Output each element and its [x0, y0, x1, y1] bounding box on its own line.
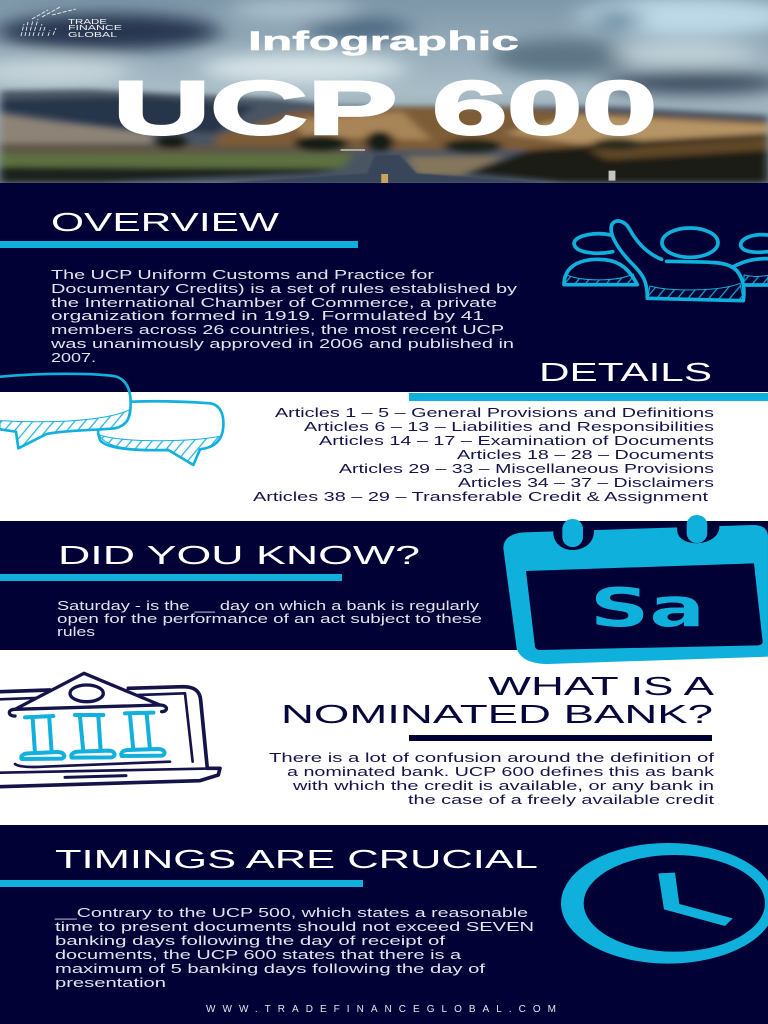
did you know text block: open for the performance of an act subject to these — [57, 612, 482, 626]
details list: Articles 38 – 29 – Transferable Credit & Assignment — [253, 490, 709, 504]
nominated bank text block: a nominated bank. UCP 600 defines this as bank — [287, 765, 715, 779]
icon: bank on a laptop — [0, 673, 220, 787]
logo: Trade Finance Global: GLOBAL — [68, 32, 117, 39]
timings text block: banking days following the day of receipt of — [55, 934, 446, 948]
did you know text block: rules — [57, 625, 95, 639]
header photo: road and clouds — [0, 0, 768, 183]
nominated bank text block: There is a lot of confusion around the definition of — [269, 751, 715, 765]
panel: timings background — [0, 825, 768, 1024]
icon: clock — [561, 843, 768, 964]
panel: did you know background — [0, 521, 768, 650]
title: UCP 600: UCP 600 — [113, 66, 657, 151]
details list: Articles 14 – 17 – Examination of Documents — [319, 434, 714, 448]
details list: Articles 18 – 28 – Documents — [457, 448, 714, 462]
details list: Articles 1 – 5 – General Provisions and Definitions — [275, 406, 714, 420]
details list — [253, 406, 714, 504]
timings text block: documents, the UCP 600 states that there is a — [55, 948, 461, 962]
details list: Articles 34 – 37 – Disclaimers — [458, 476, 714, 490]
overview text block: Documentary Credits) is a set of rules established by — [51, 282, 518, 296]
panel: details background — [0, 392, 768, 521]
details list: Articles 29 – 33 – Miscellaneous Provisions — [339, 462, 714, 476]
panel: nominated bank background — [0, 650, 768, 825]
timings text block: presentation — [55, 976, 166, 990]
icon: calendar — [503, 515, 768, 664]
overview text block: members across 26 countries, the most recent UCP — [51, 323, 504, 337]
timings accent bar — [0, 880, 363, 887]
logo: Trade Finance Global — [21, 7, 123, 39]
subtitle: Infographic: Infographic — [248, 26, 519, 56]
icon: speech bubbles — [0, 374, 223, 465]
overview accent bar — [0, 241, 358, 248]
did you know text block — [57, 599, 482, 639]
timings text block: time to present documents should not exceed SEVEN — [55, 920, 534, 934]
overview text block: The UCP Uniform Customs and Practice for — [51, 268, 434, 282]
overview text block — [49, 268, 518, 365]
panel: overview background — [0, 183, 768, 392]
heading: what is a nominated bank — [281, 673, 714, 729]
details list: Articles 6 – 13 – Liabilities and Responsibilities — [304, 420, 714, 434]
heading: what is a nominated bank: NOMINATED BANK? — [281, 701, 713, 729]
heading: what is a nominated bank: WHAT IS A — [488, 673, 714, 701]
heading: overview: OVERVIEW — [51, 209, 279, 237]
icon: group of people with raised hand — [564, 221, 768, 301]
logo: Trade Finance Global: TRADE — [68, 19, 108, 26]
overview text block: was unanimously approved in 2006 and published in — [49, 337, 514, 351]
nominated bank text block: the case of a freely available credit — [408, 793, 715, 807]
overview text block: the International Chamber of Commerce, a private — [51, 296, 497, 310]
heading: did you know: DID YOU KNOW? — [58, 542, 420, 570]
details accent bar — [409, 393, 768, 401]
overview text block: organization formed in 1919. Formulated by 41 — [51, 309, 484, 323]
heading: timings are crucial: TIMINGS ARE CRUCIAL — [55, 846, 538, 874]
footer website address: WWW.TRADEFINANCEGLOBAL.COM — [206, 1004, 556, 1015]
nominated bank text block — [269, 751, 715, 807]
icon: calendar: Sa — [590, 577, 705, 639]
heading: details: DETAILS — [539, 359, 712, 387]
logo: Trade Finance Global: FINANCE — [68, 25, 123, 32]
timings text block: __Contrary to the UCP 500, which states a reasonable — [53, 906, 528, 920]
did you know accent bar — [0, 574, 342, 581]
timings text block — [53, 906, 534, 990]
overview text block: 2007. — [51, 351, 96, 365]
timings text block: maximum of 5 banking days following the day of — [55, 962, 486, 976]
nominated bank accent bar — [409, 735, 712, 741]
nominated bank text block: with which the credit is available, or any bank in — [291, 779, 714, 793]
did you know text block: Saturday - is the __ day on which a bank is regularly — [57, 599, 480, 613]
